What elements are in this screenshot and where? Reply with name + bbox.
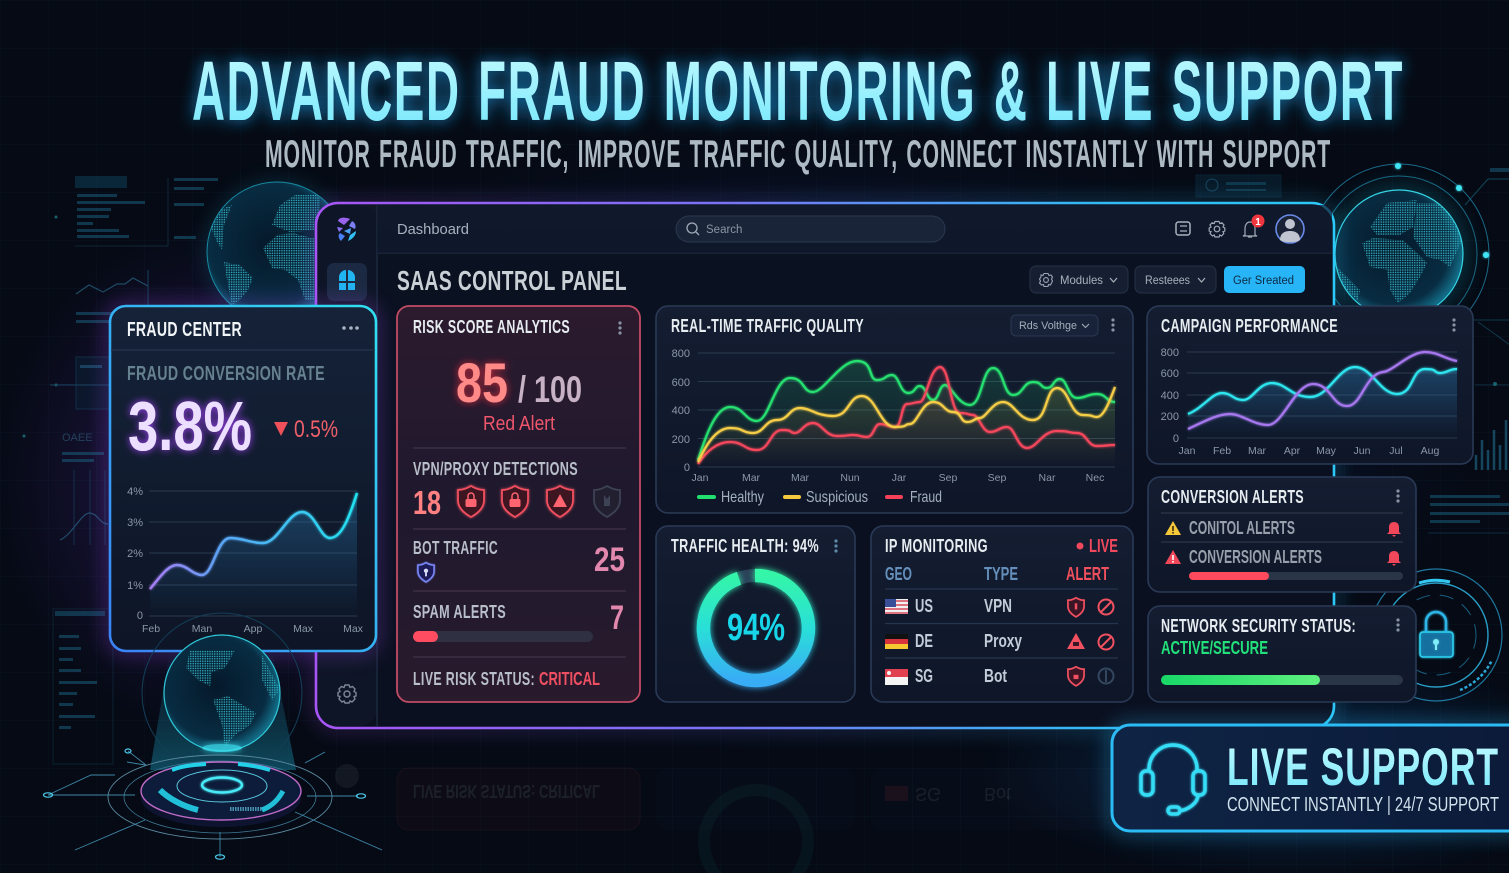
area chart: Apr: [1284, 445, 1301, 457]
table header: TYPE: [984, 564, 1018, 584]
panel heading: SAAS CONTROL PANEL: [397, 265, 627, 296]
score: [456, 351, 582, 435]
area chart: 400: [1161, 390, 1179, 402]
line chart: Max: [343, 623, 364, 635]
multi-line chart: Sep: [939, 472, 957, 484]
row: SG: Bot: [984, 666, 1007, 686]
lock emblem: [1370, 569, 1502, 701]
multi-line chart: [672, 348, 1115, 484]
icon: headset: [1141, 745, 1205, 814]
main dashboard panel: [316, 203, 1334, 728]
status bar: [1161, 675, 1403, 685]
status: ACTIVE/SECURE: [1161, 638, 1268, 658]
background data widgets, right: [1196, 168, 1509, 533]
resteees button: Resteees: [1145, 273, 1190, 287]
live risk status: CRITICAL: [539, 669, 600, 689]
panel reflection: [335, 764, 1133, 873]
conversion alerts card: [1148, 477, 1416, 592]
more menu: [342, 326, 359, 330]
globe: [142, 613, 302, 773]
menu: [1396, 618, 1400, 632]
panel reflection: LIVE RISK STATUS: CRITICAL: [413, 781, 600, 801]
legend: [697, 489, 942, 506]
line chart: [127, 486, 364, 635]
primary button: [1224, 266, 1305, 293]
line chart: Feb: [142, 623, 160, 635]
live risk status: LIVE RISK STATUS:: [413, 669, 535, 689]
risk score analytics card: [397, 306, 640, 702]
dropdown: Rds Volthge: [1019, 320, 1077, 332]
line chart: 3%: [127, 517, 143, 529]
table header: [885, 564, 1109, 584]
bottom left globe with holo platform: [44, 613, 382, 859]
donut gauge: 94%: [727, 607, 785, 649]
area chart: [1161, 347, 1457, 457]
globe: top right: [1323, 161, 1491, 310]
header icons: [1176, 214, 1304, 243]
menu: [834, 539, 838, 553]
score: 85: [456, 351, 508, 414]
donut gauge: [703, 575, 808, 680]
table header: GEO: [885, 564, 912, 584]
multi-line chart: 800: [672, 348, 690, 360]
dropdown: [1011, 315, 1098, 336]
live badge: LIVE: [1089, 536, 1118, 556]
line chart: Man: [192, 623, 212, 635]
ip monitoring card: [871, 526, 1133, 702]
network security status card: [1148, 606, 1416, 702]
title: TRAFFIC HEALTH: 94%: [671, 536, 819, 556]
score: / 100: [518, 369, 582, 410]
area chart: 600: [1161, 368, 1179, 380]
area chart: Aug: [1421, 445, 1439, 457]
title: REAL-TIME TRAFFIC QUALITY: [671, 316, 864, 336]
area chart: 0: [1173, 433, 1179, 445]
area chart: Mar: [1248, 445, 1267, 457]
background data widgets, left: OAEE: [62, 432, 93, 444]
menu: [618, 321, 622, 335]
row: DE: [885, 631, 1114, 651]
row: US: [885, 596, 1114, 617]
spam alerts: 7: [610, 599, 624, 637]
area chart: May: [1316, 445, 1337, 457]
progress bar: [1189, 572, 1403, 580]
row: DE: DE: [915, 631, 933, 651]
row: US: VPN: [984, 596, 1012, 616]
title: CAMPAIGN PERFORMANCE: [1161, 316, 1338, 336]
multi-line chart: Nec: [1086, 472, 1104, 484]
title: RISK SCORE ANALYTICS: [413, 317, 570, 337]
resteees button: [1135, 266, 1216, 293]
bot traffic: [413, 538, 625, 582]
spam alerts: SPAM ALERTS: [413, 602, 506, 622]
modules button: [1030, 266, 1128, 293]
sidebar gear: [338, 685, 356, 703]
line chart: 2%: [127, 548, 143, 560]
spam alerts: [413, 599, 624, 642]
multi-line chart: 600: [672, 377, 690, 389]
area chart: Jun: [1354, 445, 1371, 457]
multi-line chart: Mar: [791, 472, 810, 484]
row: DE: Proxy: [984, 631, 1022, 651]
alert row amber: [1165, 518, 1401, 538]
live badge: [1076, 536, 1118, 556]
title: NETWORK SECURITY STATUS:: [1161, 616, 1356, 636]
score: Red Alert: [483, 413, 555, 435]
bot traffic: 25: [594, 541, 625, 579]
row: SG: SG: [915, 666, 933, 686]
row: SG: [885, 666, 1114, 686]
menu: [1396, 489, 1400, 503]
multi-line chart: 0: [684, 462, 690, 474]
area chart: 800: [1161, 347, 1179, 359]
modules button: Modules: [1060, 273, 1103, 287]
vpn detections: [413, 459, 620, 521]
primary button: Ger Sreated: [1233, 275, 1294, 287]
card title: FRAUD CENTER: [127, 319, 242, 341]
campaign performance card: [1147, 306, 1473, 464]
multi-line chart: Nar: [1039, 472, 1056, 484]
legend: Suspicious: [806, 489, 868, 506]
row: US: US: [915, 596, 933, 616]
alert row amber: CONITOL ALERTS: [1189, 518, 1295, 538]
delta: [274, 416, 338, 443]
multi-line chart: 200: [672, 434, 690, 446]
search box: [676, 216, 945, 242]
vpn detections: VPN/PROXY DETECTIONS: [413, 459, 578, 479]
header icons: 1: [1255, 217, 1261, 228]
multi-line chart: 400: [672, 405, 690, 417]
line chart: App: [244, 623, 262, 635]
globe: top left: [199, 174, 336, 305]
table header: ALERT: [1066, 564, 1109, 584]
area chart: Jan: [1179, 445, 1196, 457]
area chart: 200: [1161, 411, 1179, 423]
bot traffic: BOT TRAFFIC: [413, 538, 498, 558]
fraud center card: [110, 306, 376, 651]
light beam: [150, 650, 296, 770]
search box: Search: [706, 224, 742, 236]
traffic health card: [656, 526, 855, 702]
multi-line chart: Jar: [892, 472, 907, 484]
breadcrumb: Dashboard: [397, 221, 469, 238]
menu: [1111, 318, 1115, 332]
line chart: 4%: [127, 486, 143, 498]
alert row red: CONVERSION ALERTS: [1189, 547, 1322, 567]
platform: [44, 749, 382, 859]
title: CONVERSION ALERTS: [1161, 487, 1304, 507]
multi-line chart: Jan: [692, 472, 709, 484]
multi-line chart: Mar: [742, 472, 761, 484]
live support banner: [1112, 725, 1509, 831]
multi-line chart: Nun: [840, 472, 860, 484]
metric label: FRAUD CONVERSION RATE: [127, 363, 325, 385]
legend: Healthy: [721, 489, 764, 506]
area chart: Jul: [1389, 445, 1403, 457]
panel reflection: Bot: [984, 784, 1011, 804]
metric value: 3.8%: [128, 387, 252, 465]
logo: [337, 218, 356, 241]
delta: 0.5%: [294, 416, 338, 443]
line chart: Max: [293, 623, 314, 635]
vpn detections: 18: [413, 484, 441, 521]
multi-line chart: Sep: [988, 472, 1006, 484]
legend: Fraud: [910, 489, 942, 506]
panel reflection: SG: [915, 784, 941, 804]
background data widgets, left: [22, 176, 218, 764]
area chart: Feb: [1213, 445, 1231, 457]
line chart: 1%: [127, 580, 143, 592]
title: IP MONITORING: [885, 536, 988, 556]
line chart: 0: [137, 610, 143, 622]
home button: [327, 263, 367, 301]
menu: [1452, 318, 1456, 332]
real-time traffic quality card: [656, 306, 1133, 513]
